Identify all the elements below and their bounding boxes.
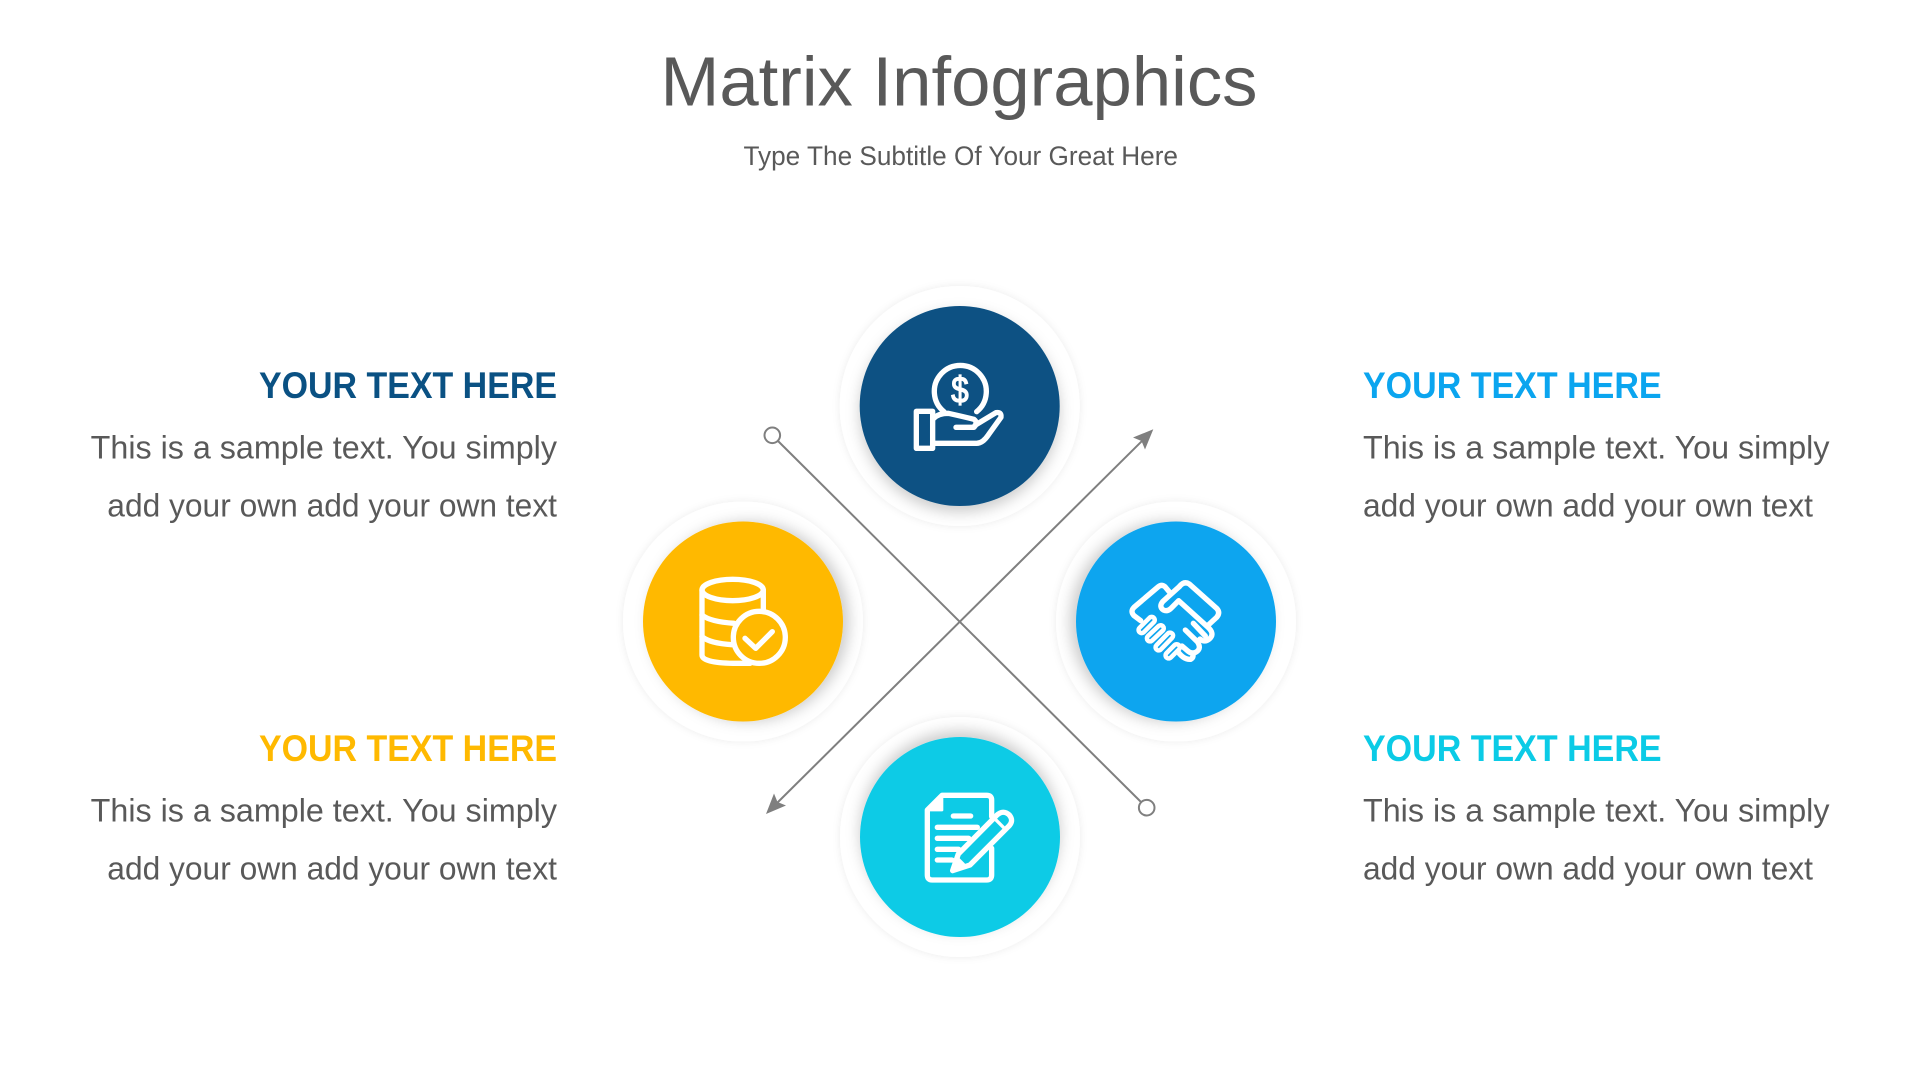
node: left circle: [623, 502, 863, 742]
body: bottom left: add your own add your own text: [107, 850, 557, 886]
body: top left: This is a sample text. You simply: [91, 430, 557, 466]
subtitle: Type The Subtitle Of Your Great Here: [744, 141, 1178, 171]
body: bottom right: [1363, 792, 1830, 886]
body: top right: [1363, 430, 1830, 524]
icon: database with check: [702, 579, 785, 663]
heading: top left: YOUR TEXT HERE: [259, 365, 557, 406]
heading: bottom right: YOUR TEXT HERE: [1363, 728, 1662, 769]
arrow: diagonal double-headed: [766, 429, 1153, 814]
node: right circle: [1056, 502, 1296, 742]
body: top right: This is a sample text. You simply: [1363, 430, 1830, 466]
title: Matrix Infographics: [660, 43, 1258, 121]
icon: document with pencil: [927, 795, 1012, 880]
text block: bottom right: [1363, 728, 1830, 886]
node: bottom circle: [840, 717, 1080, 957]
body: bottom right: This is a sample text. You simply: [1363, 792, 1830, 828]
body: bottom left: [91, 792, 557, 886]
body: bottom right: add your own add your own text: [1363, 850, 1813, 886]
body: top left: add your own add your own text: [107, 488, 557, 524]
heading: top right: YOUR TEXT HERE: [1363, 365, 1662, 406]
icon: handshake: [1132, 583, 1219, 659]
body: top right: add your own add your own text: [1363, 488, 1813, 524]
text block: bottom left: [91, 728, 557, 886]
diagonal line with circle ends: [764, 428, 1154, 816]
text block: top right: [1363, 365, 1830, 524]
icon: hand holding coin: $: [951, 370, 969, 411]
body: top left: [91, 430, 557, 524]
body: bottom left: This is a sample text. You simply: [91, 792, 557, 828]
text block: top left: [91, 365, 557, 524]
heading: bottom left: YOUR TEXT HERE: [259, 728, 557, 769]
icon: hand holding coin: [916, 365, 1001, 448]
node: top circle: [840, 286, 1080, 526]
